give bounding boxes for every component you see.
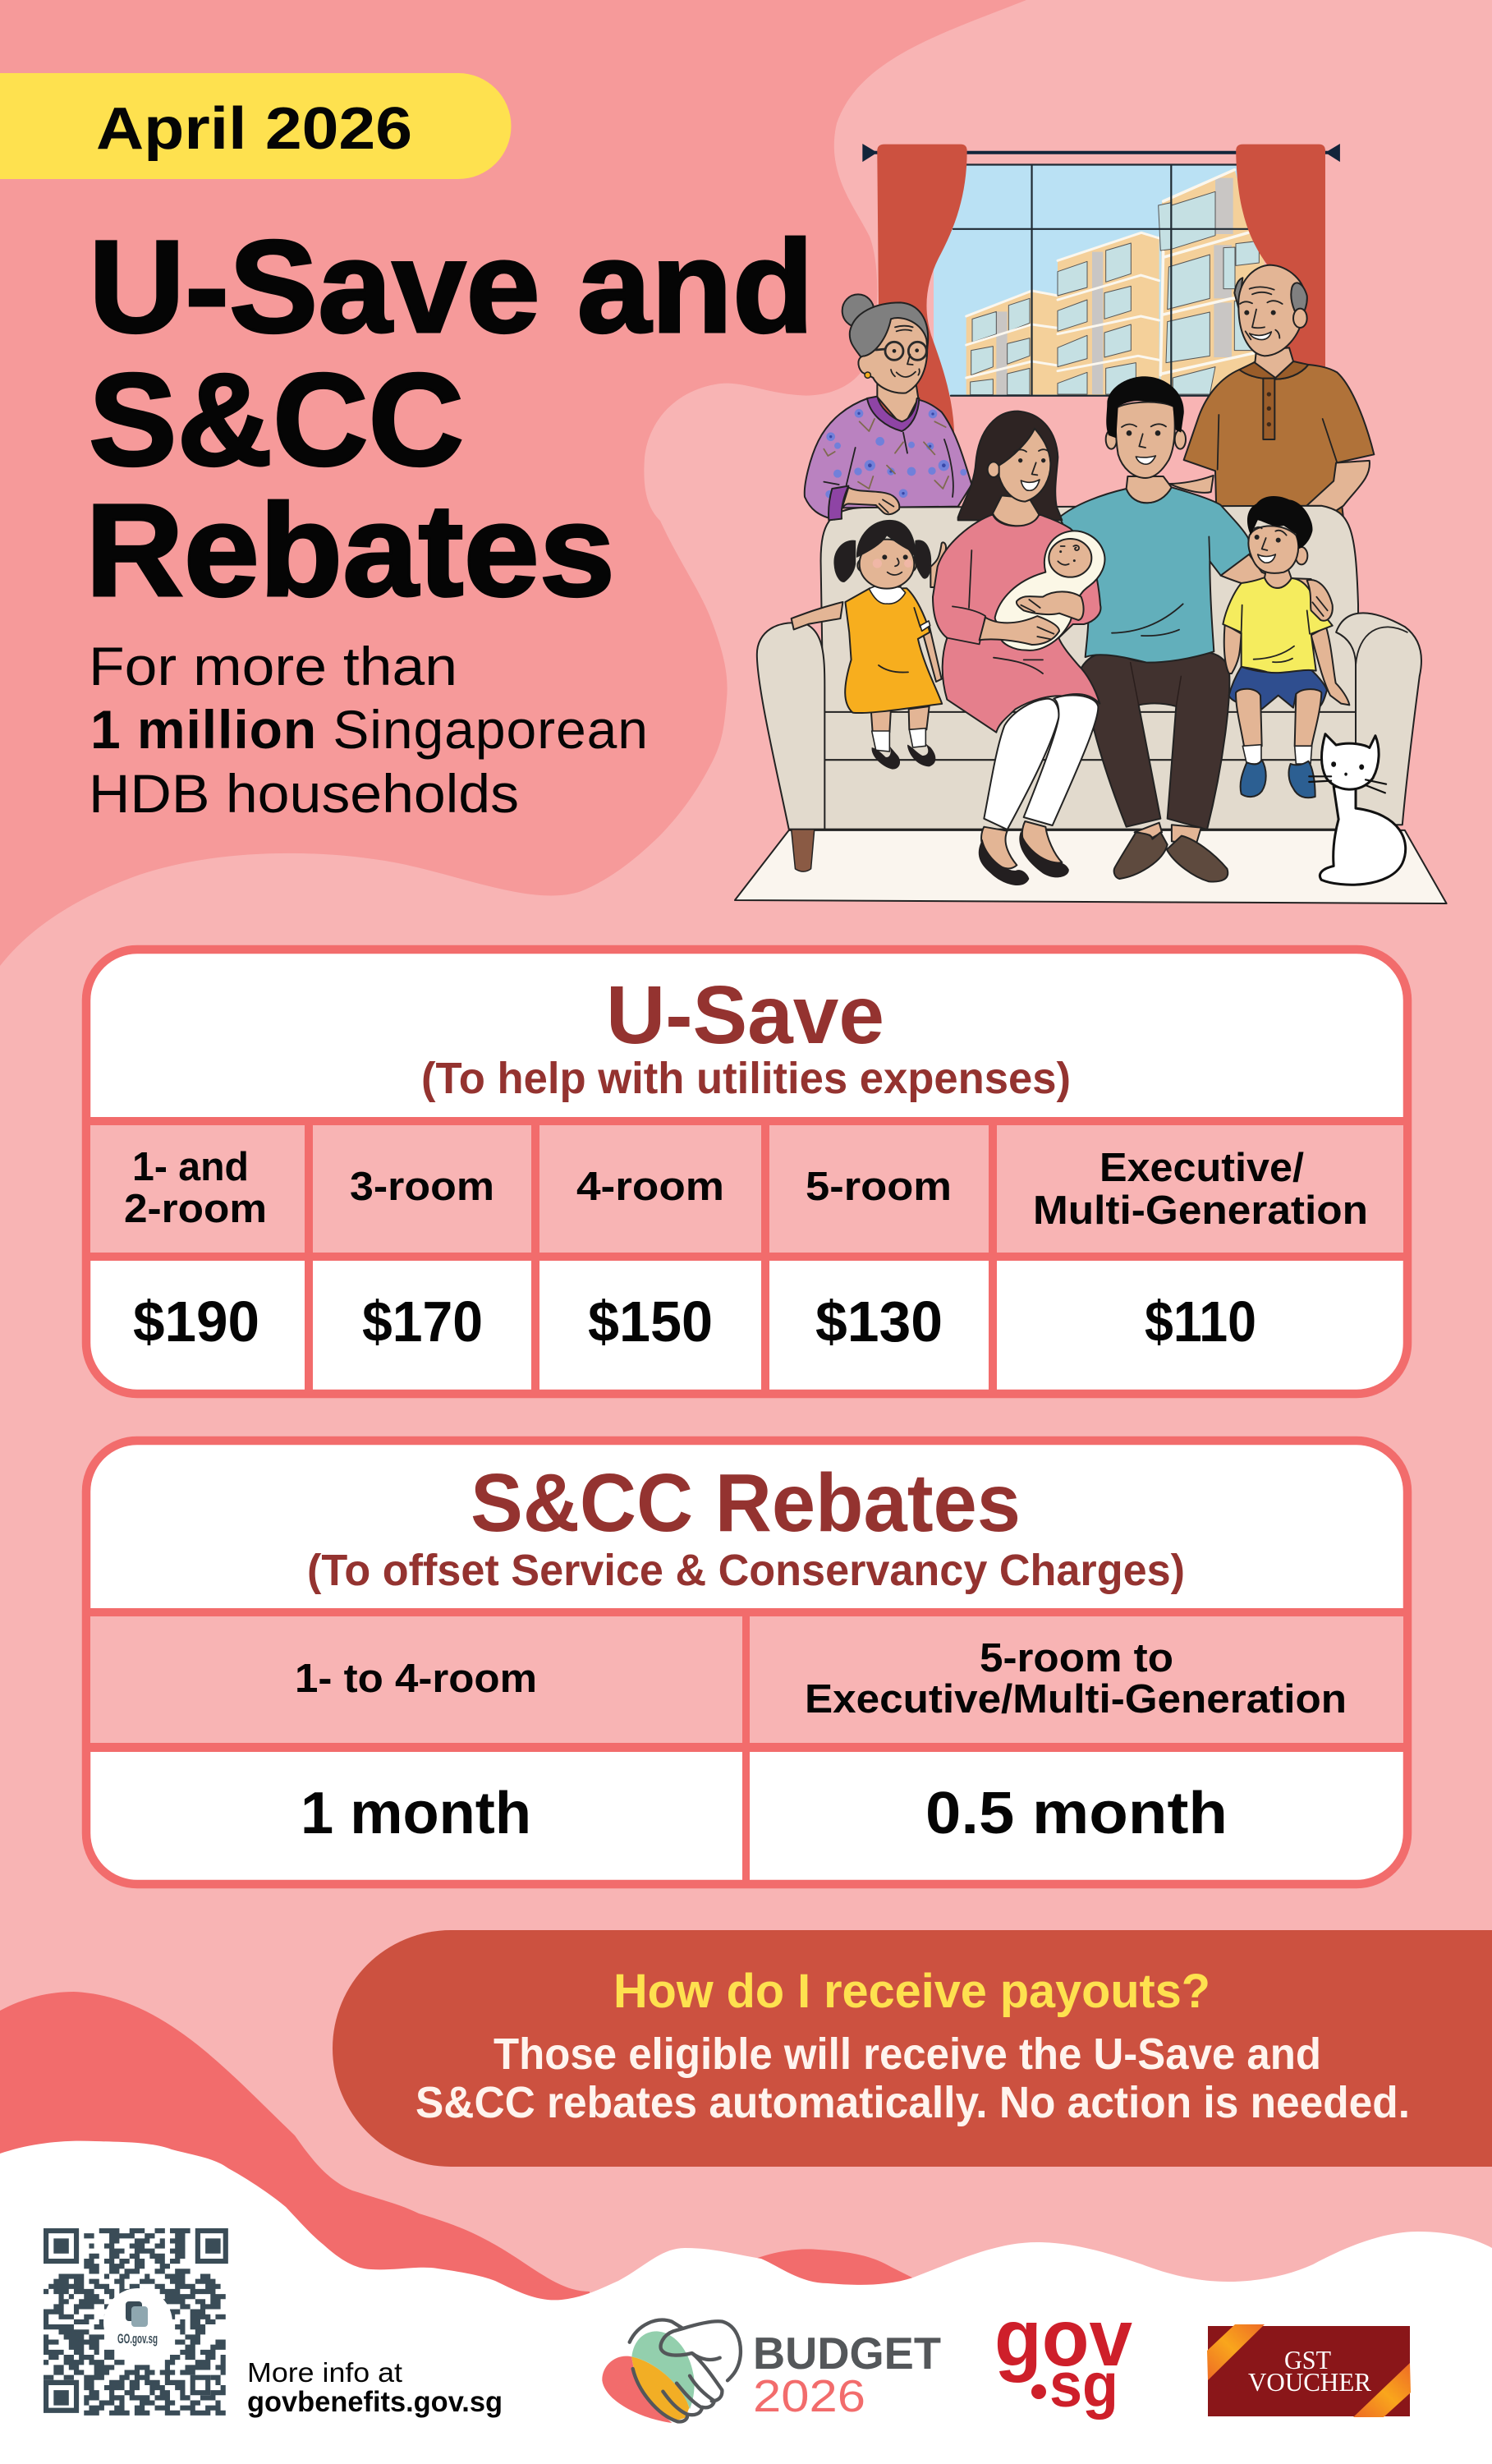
callout: how do I receive payouts: S&CC rebates automatically. No action is needed. (415, 2078, 1410, 2127)
panel: U-Save: 1- and (132, 1145, 249, 1189)
panel: U-Save: Executive/ (1099, 1146, 1304, 1190)
panel: U-Save: Multi-Generation (1033, 1188, 1368, 1233)
panel: U-Save: (To help with utilities expenses) (421, 1054, 1071, 1103)
date pill: April 2026 (96, 96, 412, 162)
panel: U-Save: $190 (133, 1289, 259, 1354)
girl (792, 520, 942, 770)
cat (1309, 734, 1406, 885)
panel: U-Save: 3-room (350, 1165, 494, 1209)
more info text (247, 2357, 503, 2418)
panel: S&CC Rebates: 1 month (301, 1781, 531, 1846)
title: Rebates (85, 476, 615, 623)
more info text: govbenefits.gov.sg (247, 2386, 503, 2418)
sofa (757, 506, 1421, 871)
subtitle: For more than (89, 636, 457, 696)
date pill (0, 73, 511, 179)
logo: gov.sg (994, 2292, 1132, 2420)
callout: how do I receive payouts: How do I receive payouts? (613, 1965, 1210, 2018)
building right (1159, 170, 1265, 394)
building left (966, 291, 1058, 395)
logo: Budget 2026: 2026 (753, 2370, 865, 2421)
boy (1223, 496, 1349, 798)
panel: U-Save: 5-room (806, 1165, 952, 1209)
white footer wave (0, 2141, 1492, 2464)
grandmother (805, 294, 971, 520)
title (85, 213, 814, 623)
QR code: GO.gov.sg (117, 2331, 158, 2347)
panel: U-Save: 2-room (124, 1187, 267, 1231)
subtitle: 1 million Singaporean (90, 699, 648, 760)
darker pink blob (0, 0, 1026, 966)
more info text: More info at (247, 2357, 402, 2388)
curtain rod (862, 144, 1340, 162)
window view (934, 164, 1265, 396)
panel: U-Save: 4-room (576, 1165, 724, 1209)
panel: S&CC Rebates: 1- to 4-room (295, 1657, 537, 1701)
left curtain (877, 145, 967, 434)
logo: gov.sg: gov (994, 2292, 1132, 2383)
callout: how do I receive payouts: Those eligible will receive the U-Save and (494, 2030, 1321, 2079)
panel: S&CC Rebates: 5-room to (980, 1636, 1173, 1680)
right curtain (1236, 145, 1325, 379)
grandfather (1169, 265, 1374, 528)
callout: how do I receive payouts (333, 1930, 1492, 2167)
QR code (44, 2231, 226, 2413)
panel: S&CC Rebates: Executive/Multi-Generation (805, 1677, 1347, 1722)
panel: S&CC Rebates: (To offset Service & Conservancy Charges) (307, 1546, 1185, 1595)
rug (735, 830, 1447, 903)
mother (930, 411, 1104, 885)
panel: U-Save: $150 (588, 1289, 713, 1354)
illustration: family on sofa (735, 144, 1447, 903)
panel: U-Save: $170 (362, 1289, 483, 1354)
logo: GST voucher: VOUCHER (1248, 2367, 1372, 2397)
title: S&CC (89, 346, 464, 493)
coral bump (751, 2249, 924, 2300)
logo: GST voucher (1207, 2324, 1411, 2417)
panel: S&CC Rebates: S&CC Rebates (471, 1457, 1021, 1549)
father (1059, 376, 1320, 881)
subtitle (89, 636, 648, 824)
panel: S&CC Rebates: 0.5 month (925, 1781, 1228, 1846)
coral wave (0, 1992, 590, 2324)
panel: U-Save (86, 949, 1407, 1395)
logo: Budget 2026: BUDGET (753, 2328, 941, 2379)
panel: S&CC Rebates (86, 1441, 1407, 1884)
logo: gov.sg: sg (1049, 2351, 1118, 2420)
subtitle: HDB households (89, 763, 519, 824)
panel: U-Save: $110 (1145, 1289, 1256, 1354)
logo: GST voucher: GST (1284, 2345, 1331, 2374)
panel: U-Save: U-Save (606, 969, 884, 1061)
panel: U-Save: $130 (815, 1289, 943, 1354)
title: U-Save and (89, 213, 814, 360)
building centre (1058, 232, 1159, 396)
logo: Budget 2026 (602, 2320, 941, 2423)
